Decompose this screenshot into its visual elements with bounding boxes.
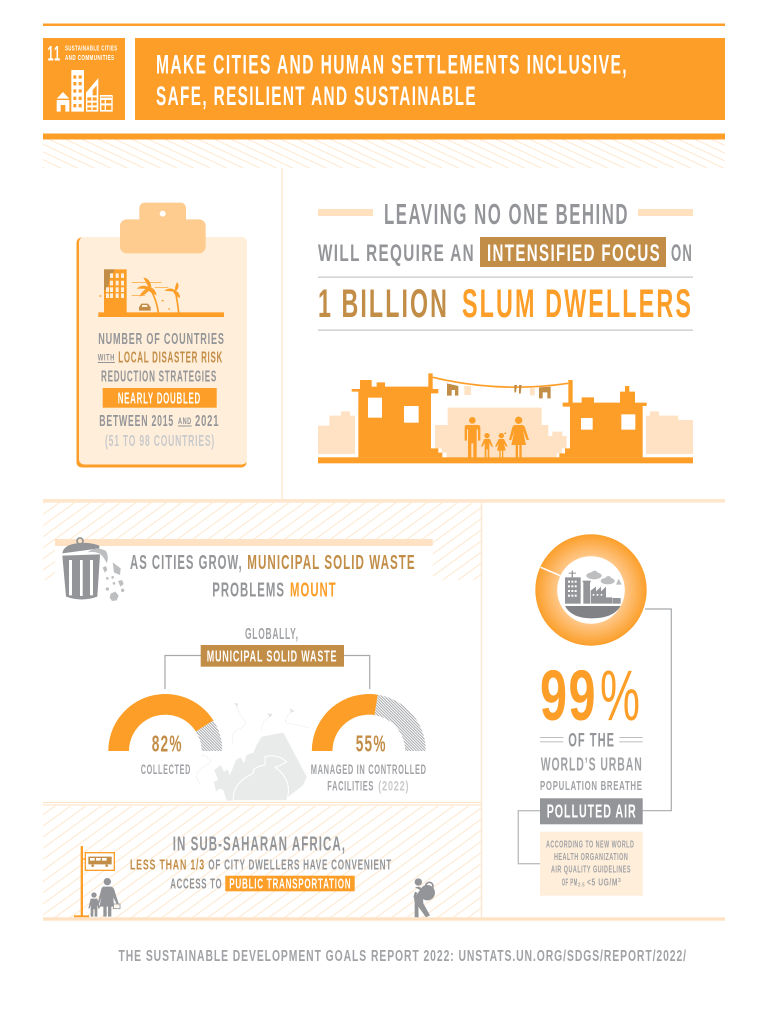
icon: traveller with backpack [413, 878, 435, 917]
text: disaster risk statistic: REDUCTION STRATEGIES [101, 368, 217, 385]
heading: waste problems: MUNICIPAL SOLID WASTE [247, 552, 416, 574]
icon: bus stop with woman and child [74, 846, 120, 917]
illustration: waste pile [197, 703, 310, 801]
callout: WHO air quality guidelines: 2.5 [578, 882, 585, 888]
callout: WHO air quality guidelines [540, 832, 643, 896]
chart: 82% collected: 82% [152, 731, 183, 757]
SDG 11 badge: SUSTAINABLE CITIES [65, 44, 118, 53]
stat: 99% of the world's urban population: 99 [540, 657, 597, 736]
panel: leaving no one behind [318, 199, 693, 463]
panel: public transportation [43, 806, 481, 918]
text: public transportation: PUBLIC TRANSPORTATION [229, 876, 351, 893]
SDG 11 badge: AND COMMUNITIES [65, 53, 114, 62]
text: intensified focus: WILL REQUIRE AN [318, 240, 475, 267]
title banner [135, 38, 725, 120]
callout: WHO air quality guidelines: <5 UG/M [587, 878, 618, 889]
chart: 82% collected [108, 694, 222, 777]
chart: 82% collected: COLLECTED [141, 762, 191, 777]
callout: WHO air quality guidelines: AIR QUALITY GUIDELINES [551, 865, 631, 876]
text: disaster risk statistic: AND [178, 416, 192, 427]
heading: waste problems: AS CITIES GROW, [130, 552, 243, 574]
stat: 99% of the world's urban population [540, 657, 643, 793]
text: public transportation: ACCESS TO [170, 875, 222, 892]
text: public transportation: OF CITY DWELLERS HAVE CONVENIENT [208, 856, 392, 873]
heading: waste problems: PROBLEMS [212, 580, 285, 602]
text: disaster risk statistic: WITH [98, 352, 115, 364]
header [43, 24, 725, 140]
chart: 55% managed in controlled facilities: (2022) [378, 779, 409, 794]
icon: trash can [62, 538, 124, 601]
text: public transportation [130, 834, 392, 893]
illustration: slum houses and family [318, 373, 693, 463]
label: globally municipal solid waste [165, 626, 370, 689]
label: globally municipal solid waste: MUNICIPAL SOLID WASTE [207, 649, 337, 666]
text: disaster risk statistic: BETWEEN 2015 [99, 413, 174, 430]
stat: 99% of the world's urban population: OF THE [568, 731, 615, 752]
label: polluted air [540, 798, 643, 824]
chart: 55% managed in controlled facilities: FACILITIES [327, 779, 374, 794]
callout: WHO air quality guidelines: OF PM [562, 878, 578, 889]
text: disaster risk statistic: 2021 [195, 413, 219, 430]
callout: WHO air quality guidelines: HEALTH ORGANIZATION [554, 852, 628, 863]
stat: 99% of the world's urban population: POPULATION BREATHE [540, 778, 643, 793]
callout: WHO air quality guidelines: ACCORDING TO NEW WORLD [546, 839, 634, 850]
chart: 55% managed in controlled facilities: MANAGED IN CONTROLLED [311, 762, 427, 777]
panel: municipal solid waste [43, 503, 481, 801]
panel: disaster risk clipboard [76, 203, 247, 468]
text: disaster risk statistic: LOCAL DISASTER RISK [118, 350, 223, 367]
text: intensified focus [318, 237, 693, 267]
text: public transportation: LESS THAN 1/3 [130, 856, 205, 873]
SDG 11 badge [43, 38, 125, 120]
text: disaster risk statistic: NEARLY DOUBLED [118, 390, 201, 407]
text: 1 billion slum dwellers [318, 282, 693, 326]
chart: 55% managed in controlled facilities [311, 694, 427, 794]
stat: 99% of the world's urban population: % [600, 657, 640, 736]
text: disaster risk statistic [98, 331, 225, 450]
title banner: SAFE, RESILIENT AND SUSTAINABLE [156, 81, 477, 111]
panel: urban air pollution [518, 534, 671, 896]
text: disaster risk statistic: NUMBER OF COUNTRIES [98, 331, 225, 348]
heading: waste problems: MOUNT [290, 580, 337, 602]
text: intensified focus: ON [671, 240, 693, 267]
icon: clipboard clip [120, 203, 206, 253]
text: public transportation: IN SUB-SAHARAN AFRICA, [173, 834, 346, 856]
stat: 99% of the world's urban population: WORLD’S URBAN [541, 755, 643, 775]
callout: WHO air quality guidelines: 3 [618, 878, 621, 884]
heading: leaving no one behind [318, 199, 693, 231]
heading: waste problems [130, 552, 416, 602]
text: intensified focus: INTENSIFIED FOCUS [487, 240, 661, 267]
label: polluted air: POLLUTED AIR [547, 801, 637, 821]
text: 1 billion slum dwellers: 1 BILLION [318, 282, 449, 326]
icon: storm damaged building and palms [98, 269, 224, 317]
text: disaster risk statistic: (51 TO 98 COUNTRIES) [105, 433, 215, 450]
chart: 55% managed in controlled facilities: 55% [356, 731, 387, 757]
icon: 99 percent ring with city [535, 534, 647, 646]
SDG 11 badge: 11 [48, 43, 61, 66]
label: globally municipal solid waste: GLOBALLY, [245, 626, 299, 643]
